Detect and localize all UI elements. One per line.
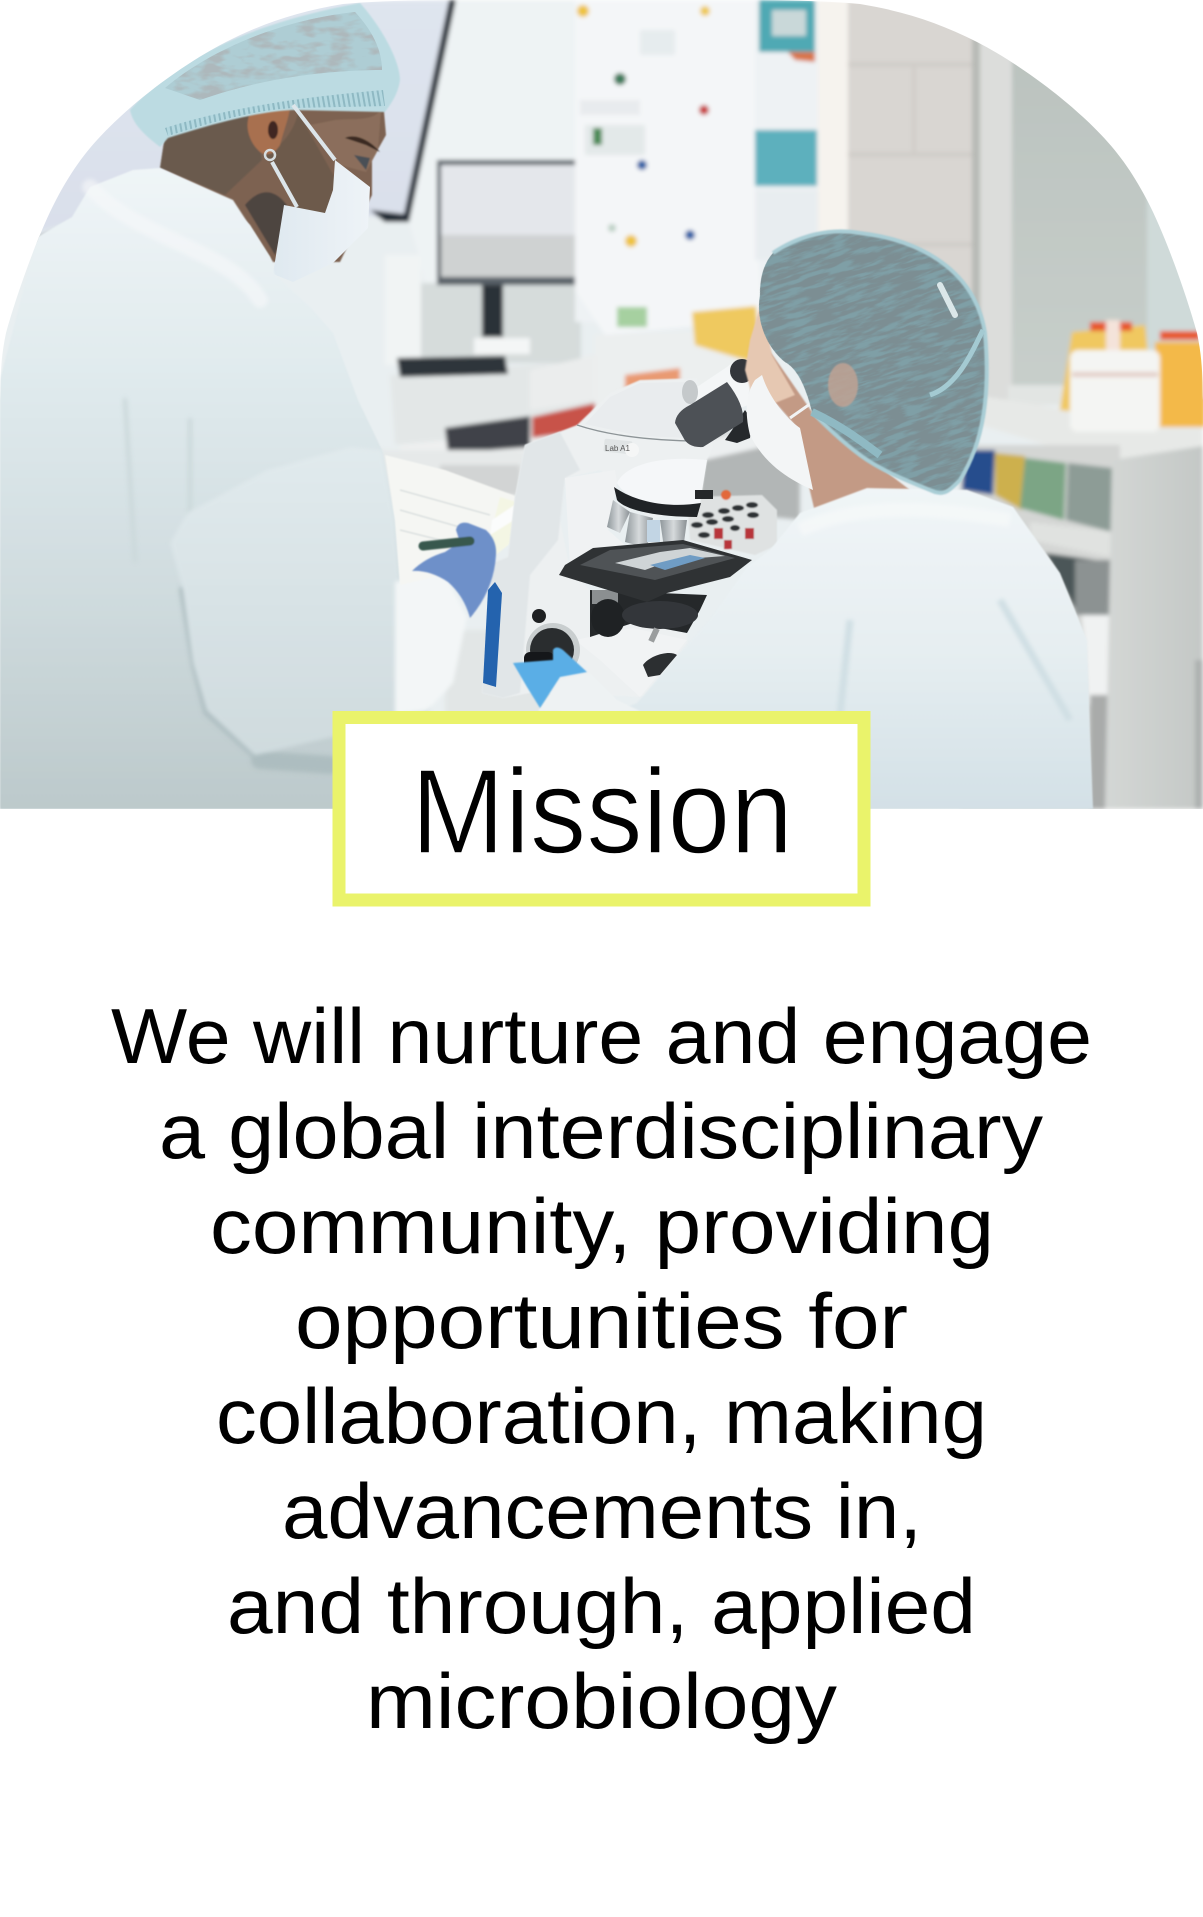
small monitor bbox=[437, 160, 590, 354]
mission statement text: opportunities for bbox=[295, 1277, 908, 1365]
inner recess bbox=[565, 478, 566, 479]
mission statement text: and through, applied bbox=[227, 1562, 976, 1650]
counter behind microscope bbox=[591, 399, 601, 411]
man mask bbox=[273, 160, 370, 282]
column shading bbox=[482, 432, 580, 698]
man sleeve bbox=[174, 496, 398, 756]
blue stripe bbox=[483, 582, 502, 687]
heading box: Mission bbox=[339, 718, 864, 900]
ear bbox=[246, 110, 290, 155]
base plinth bbox=[575, 628, 687, 697]
mission statement text: a global interdisciplinary bbox=[159, 1087, 1043, 1175]
mask straps and earring bbox=[265, 105, 335, 207]
woman hairnet bbox=[682, 165, 1064, 560]
photo: scientists at a microscope bbox=[0, 0, 1203, 809]
bulletin board bbox=[575, 0, 825, 335]
ledge and grey wall behind microscope bbox=[700, 425, 800, 520]
woman glove bbox=[513, 648, 587, 708]
man coat bbox=[0, 167, 381, 809]
woman forehead bbox=[745, 300, 795, 405]
label plate bbox=[604, 439, 632, 454]
woman gown bbox=[617, 488, 1093, 809]
man hairnet bbox=[130, 3, 400, 147]
woman neck and face bbox=[760, 340, 910, 512]
coat creases bbox=[90, 187, 330, 765]
yellow container behind head bbox=[692, 306, 762, 365]
eyepiece bbox=[675, 359, 754, 447]
mission statement text: microbiology bbox=[366, 1657, 837, 1745]
arm seam bbox=[577, 425, 690, 441]
microscope body bbox=[516, 378, 708, 695]
control knobs bbox=[524, 609, 677, 677]
woman mask bbox=[747, 375, 813, 490]
man in lab coat bbox=[0, 3, 467, 809]
microscope stage bbox=[559, 540, 752, 602]
nosepiece bbox=[607, 460, 713, 544]
microscope bbox=[482, 359, 777, 698]
right cabinet and shelves bbox=[960, 445, 1203, 809]
clipboard and paper bbox=[386, 456, 515, 582]
mission statement text bbox=[111, 992, 1092, 1745]
wall behind monitor bbox=[406, 10, 454, 224]
gown creases bbox=[800, 510, 1070, 809]
man glove and pen bbox=[412, 523, 496, 618]
focus assembly bbox=[590, 590, 707, 643]
small monitor backdrop bbox=[421, 283, 581, 363]
sleeve cuff bbox=[395, 570, 467, 715]
man head and neck bbox=[159, 109, 387, 263]
background wall bbox=[0, 0, 1203, 809]
desk device bbox=[393, 354, 598, 496]
containers on counter bbox=[1060, 320, 1203, 432]
mission statement text: We will nurture and engage bbox=[111, 992, 1092, 1080]
mission statement text: advancements in, bbox=[282, 1467, 922, 1555]
label plate: Lab A1 bbox=[605, 444, 630, 453]
desk under microscope bbox=[447, 632, 539, 711]
paper cylinder bbox=[385, 255, 421, 365]
woman sleeve bbox=[538, 673, 640, 711]
right counter bbox=[985, 402, 1201, 456]
large monitor bbox=[0, 0, 456, 245]
mission statement text: community, providing bbox=[210, 1182, 994, 1270]
tube rack bbox=[687, 490, 777, 555]
woman bbox=[513, 165, 1093, 809]
wall tiles and window bbox=[818, 0, 1203, 420]
mission statement text: collaboration, making bbox=[216, 1372, 987, 1460]
head top highlight bbox=[585, 382, 690, 438]
heading text: Mission bbox=[411, 743, 793, 879]
